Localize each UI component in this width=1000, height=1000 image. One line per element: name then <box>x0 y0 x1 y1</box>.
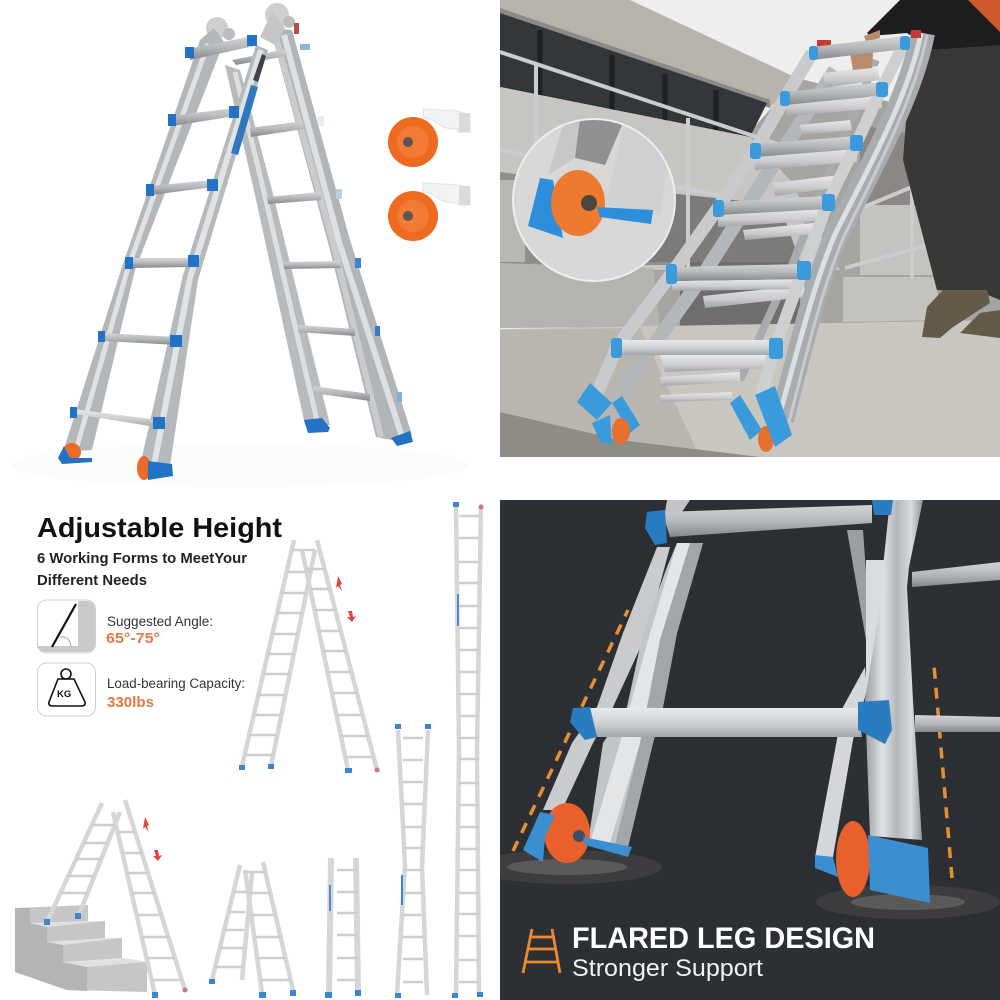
ladder form: folded <box>325 858 361 998</box>
blue feet <box>523 812 930 903</box>
right legs <box>815 500 923 857</box>
load capacity text <box>107 676 245 711</box>
ladder: blue label strip <box>231 54 266 155</box>
pavement <box>500 320 1000 457</box>
icon: red down arrow lower <box>153 850 162 861</box>
left legs <box>543 543 703 847</box>
inner ladder rails and rungs <box>620 60 882 402</box>
icon: suggested angle <box>38 600 96 653</box>
ground shadows <box>472 850 1000 919</box>
ladder: front rungs with blue caps <box>70 35 257 429</box>
orange dashed guides <box>513 610 952 878</box>
suggested angle text: Suggested Angle: <box>107 614 213 629</box>
building roof band <box>500 0 797 108</box>
icon: ladder <box>523 929 560 973</box>
icon: spare orange wheel two with bracket <box>388 183 470 241</box>
far rungs <box>912 562 1000 732</box>
panel: adjustable height <box>0 500 500 1000</box>
icon: red up arrow <box>336 576 342 591</box>
ladder rails <box>597 33 927 422</box>
dark area seen through ladder <box>680 262 800 330</box>
subtitle <box>37 550 247 589</box>
ladder form: on stairs <box>44 800 188 998</box>
building behind person <box>640 78 1000 330</box>
ladder front rungs with blue caps <box>611 36 910 359</box>
stair wall right <box>843 277 945 322</box>
subtitle: Different Needs <box>37 572 147 589</box>
ladder: back section rails <box>225 28 413 446</box>
subtitle: 6 Working Forms to MeetYour <box>37 550 247 567</box>
feet and wheels of leaning ladder <box>577 383 792 452</box>
ladder: front section rails <box>63 28 268 466</box>
panel: product ladder with spare wheels <box>0 0 500 500</box>
building windows <box>500 13 767 137</box>
ladder form: half extended <box>395 724 431 998</box>
icon: spare orange wheel one with bracket <box>388 109 470 167</box>
ladder: wheels and blue feet <box>58 443 173 480</box>
middle rung <box>587 708 862 737</box>
caption: wheels for easy carry: WHEELS FOR EASY CARRY <box>578 463 934 495</box>
blue rung caps <box>570 500 893 744</box>
caption bar <box>500 457 1000 500</box>
inset: wheel close-up circle <box>513 118 675 281</box>
stairs <box>15 905 147 992</box>
building concrete facade <box>500 87 840 270</box>
panel: flared leg design <box>472 500 1000 1000</box>
icon: orange wheel <box>550 467 570 487</box>
hands and red latch <box>817 30 921 70</box>
handrails <box>500 50 926 278</box>
heading: flared leg design: FLARED LEG DESIGN <box>572 922 875 955</box>
load capacity text: Load-bearing Capacity: <box>107 676 245 691</box>
wheels <box>544 803 870 897</box>
top rung <box>662 500 872 537</box>
ladder form: full extension <box>452 502 484 998</box>
panel: wheels for easy carry photo <box>500 0 1000 500</box>
icon: load weight kg: KG <box>57 689 71 700</box>
ladder form: short A-frame <box>209 862 296 998</box>
person jacket and legs <box>867 0 1000 338</box>
icon: red down arrow <box>347 611 356 622</box>
concrete wall left <box>500 263 660 328</box>
title: Adjustable Height <box>37 512 282 543</box>
icon: load weight kg <box>38 663 96 716</box>
suggested angle text <box>106 614 213 647</box>
load capacity text: 330lbs <box>107 694 154 711</box>
icon: red up arrow lower <box>143 817 149 832</box>
ladder: hinges <box>206 3 310 50</box>
ladder form: large A-frame <box>239 540 380 773</box>
suggested angle text: 65°-75° <box>106 630 160 647</box>
subheading: stronger support: Stronger Support <box>572 955 763 982</box>
